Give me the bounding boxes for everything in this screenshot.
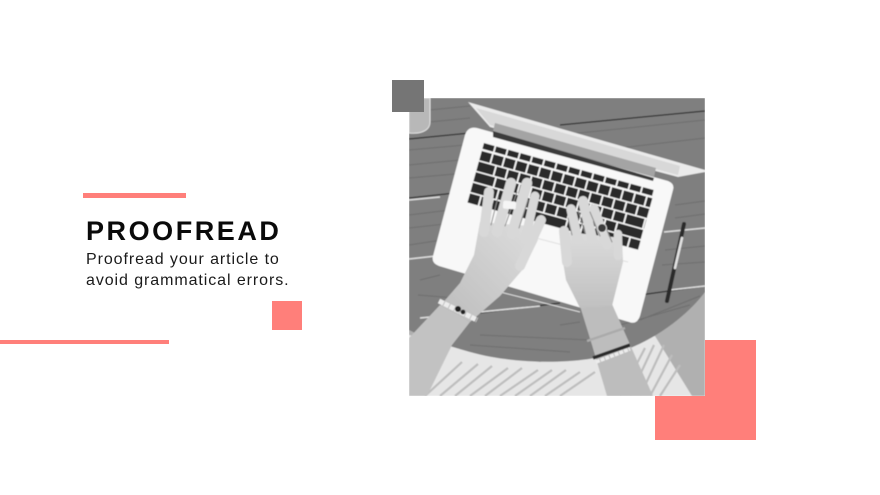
pen bbox=[667, 224, 684, 301]
photo: hands typing on laptop bbox=[409, 98, 705, 396]
glass bbox=[409, 98, 430, 133]
round wooden table bbox=[409, 98, 705, 362]
gray square bbox=[392, 80, 424, 112]
small pink square bbox=[272, 301, 302, 330]
background ground bbox=[409, 98, 705, 396]
finger ring bbox=[503, 200, 516, 210]
wood grain bbox=[409, 106, 705, 352]
keyboard bbox=[469, 146, 654, 245]
body text: avoid grammatical errors. bbox=[86, 272, 290, 289]
left hand and arm bbox=[409, 183, 541, 396]
pink L-shaped accent bbox=[655, 340, 756, 440]
top accent bar bbox=[83, 193, 186, 198]
table plank lines bbox=[409, 111, 705, 313]
hinge bbox=[493, 131, 654, 181]
right hand and arm bbox=[561, 201, 653, 396]
trackpad edge bbox=[500, 238, 628, 312]
bottom accent bar bbox=[0, 340, 169, 344]
clothing stripes bbox=[409, 335, 692, 396]
laptop screen bbox=[468, 102, 705, 177]
left bracelet bbox=[439, 301, 477, 320]
laptop base bbox=[433, 128, 673, 323]
body text bbox=[86, 251, 290, 289]
gemstone ring bbox=[598, 224, 606, 232]
title: PROOFREAD bbox=[86, 216, 281, 246]
right bracelets bbox=[587, 328, 630, 362]
body text: Proofread your article to bbox=[86, 251, 280, 268]
